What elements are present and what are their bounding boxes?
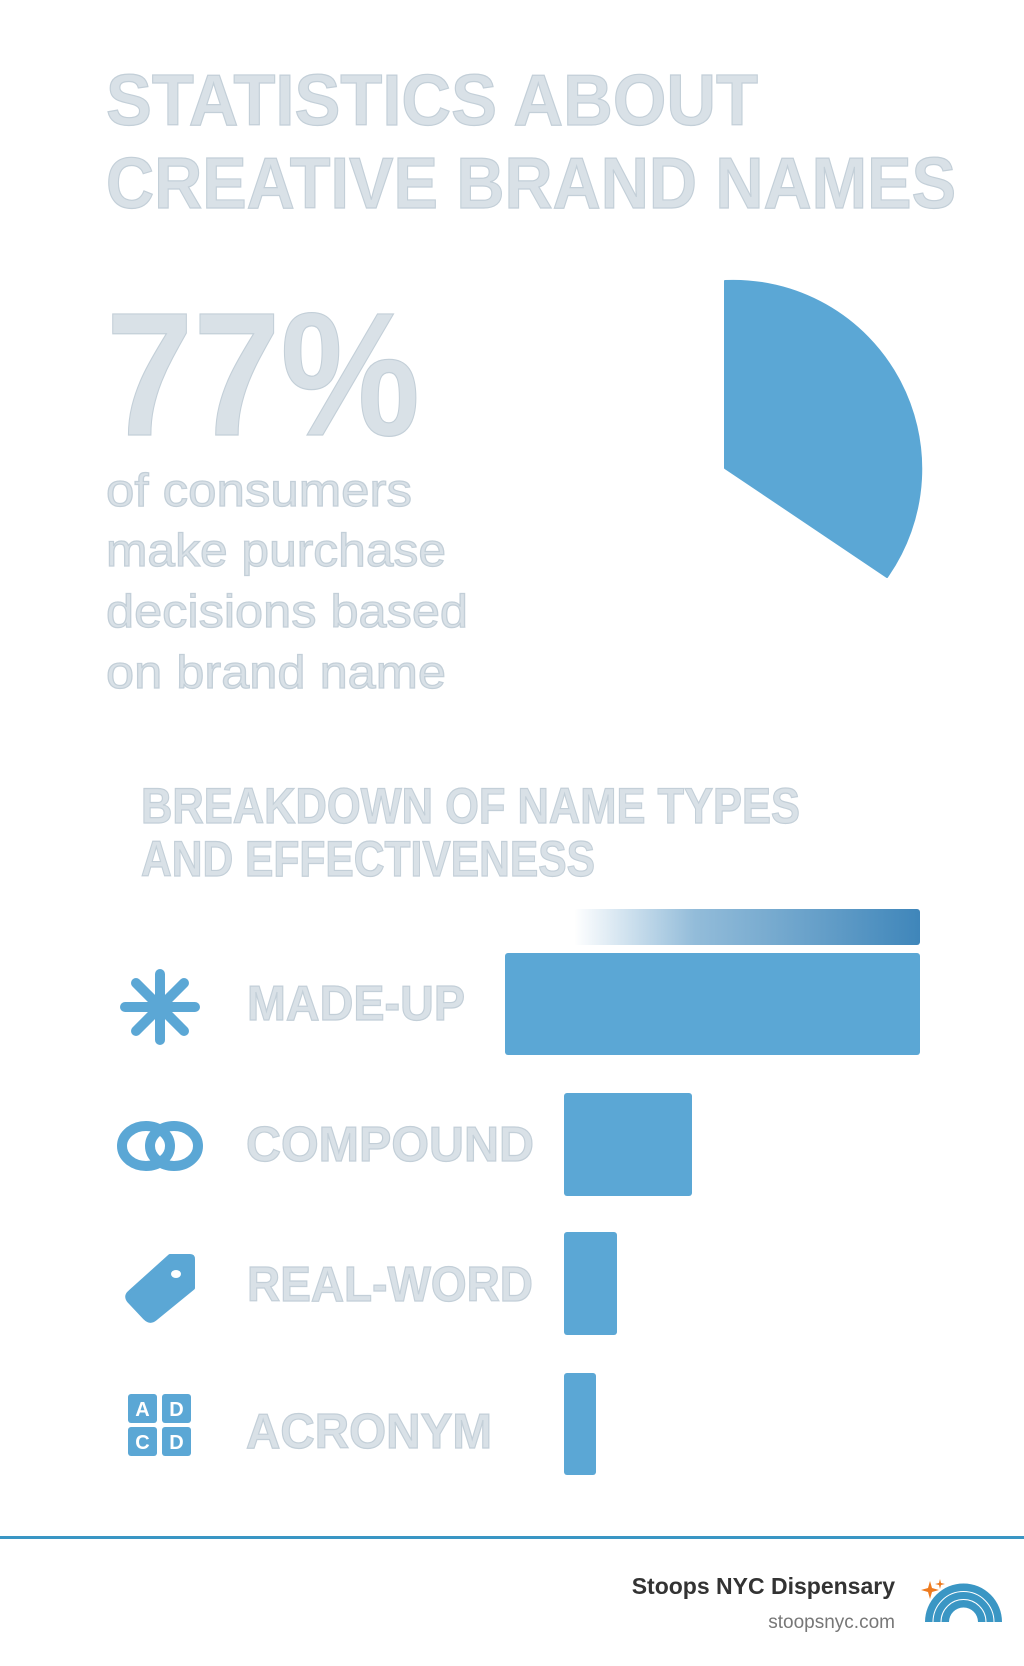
stat description: [106, 464, 468, 698]
title: CREATIVE BRAND NAMES: [106, 144, 956, 224]
icon: letter blocks: [128, 1394, 191, 1456]
row: made-up: MADE-UP: [247, 977, 465, 1031]
logo: rainbow with sparkles: [921, 1579, 1002, 1622]
row: real-word: REAL-WORD: [247, 1258, 533, 1312]
icon: tag: [127, 1256, 193, 1321]
stat description: make purchase: [106, 524, 446, 576]
row: acronym: ACRONYM: [246, 1405, 492, 1459]
icon: letter blocks: D: [169, 1432, 184, 1454]
footer brand text: stoopsnyc.com: [768, 1612, 895, 1633]
stat description: on brand name: [106, 646, 446, 698]
row: compound: COMPOUND: [246, 1118, 534, 1172]
footer brand text: Stoops NYC Dispensary: [632, 1573, 895, 1599]
title: STATISTICS ABOUT: [106, 61, 758, 141]
row: real-word: [127, 1232, 617, 1335]
footer divider: [0, 1536, 1024, 1539]
bar shadow decoration: [574, 909, 920, 945]
section heading: AND EFFECTIVENESS: [141, 831, 595, 887]
row: made-up: [125, 953, 920, 1055]
title: [106, 61, 956, 224]
icon: letter blocks: A: [135, 1399, 150, 1421]
footer brand text: [632, 1573, 895, 1633]
icon: linked rings: [122, 1126, 198, 1166]
section heading: BREAKDOWN OF NAME TYPES: [141, 778, 800, 834]
icon: letter blocks: D: [169, 1399, 184, 1421]
row: compound: [122, 1093, 692, 1196]
section heading: [141, 778, 800, 887]
stat description: decisions based: [106, 585, 468, 637]
row: acronym: [128, 1373, 596, 1475]
stat description: of consumers: [106, 464, 412, 516]
icon: letter blocks: C: [135, 1432, 150, 1454]
icon: asterisk: [125, 974, 195, 1040]
big stat: 77%: 77%: [106, 277, 420, 473]
pie chart segment: [725, 281, 921, 577]
